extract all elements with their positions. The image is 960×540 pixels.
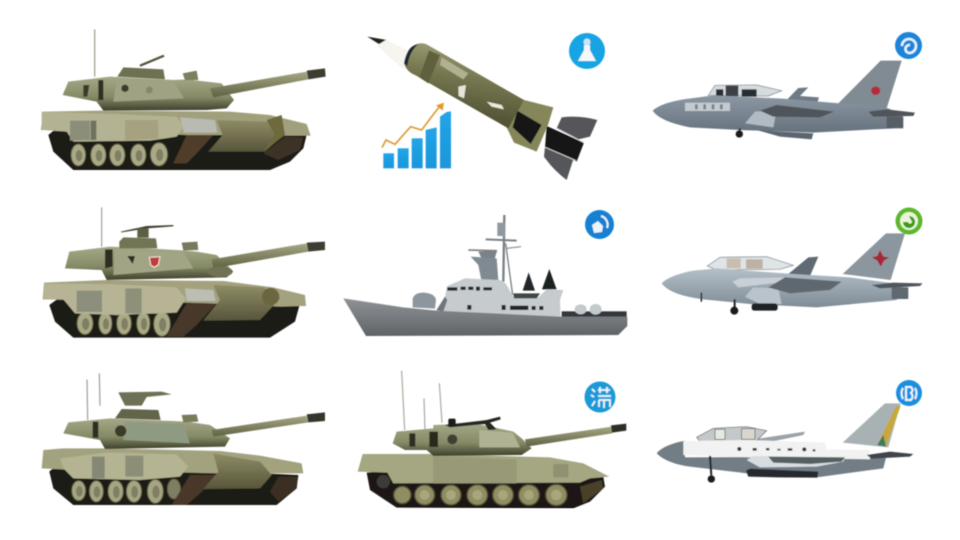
tank: bottom left bbox=[42, 373, 325, 505]
window dots bbox=[737, 447, 815, 451]
yellow tail stripe bbox=[877, 406, 901, 447]
wheel hubs bbox=[82, 318, 166, 331]
hull bbox=[343, 298, 627, 336]
hull deck bbox=[43, 280, 306, 307]
hull deck bbox=[42, 448, 303, 473]
road wheels bbox=[72, 479, 181, 503]
icon: blue globe badge bbox=[585, 210, 614, 239]
dorsal fin bbox=[787, 87, 819, 105]
fuselage lower bbox=[657, 441, 887, 477]
fuselage bbox=[653, 95, 903, 133]
dorsal fin bbox=[788, 257, 818, 276]
tail fin bbox=[843, 403, 901, 447]
track links bbox=[173, 135, 213, 163]
gun mantlet bbox=[207, 266, 233, 277]
under-wing pod bbox=[746, 469, 818, 478]
jet: middle right bbox=[662, 233, 923, 315]
side plate bbox=[180, 117, 217, 133]
air intake bbox=[745, 110, 777, 127]
tail emblem bbox=[871, 86, 880, 95]
main gun bbox=[212, 416, 308, 437]
missile body bbox=[404, 43, 524, 128]
canopy bbox=[707, 257, 793, 270]
bridge windows bbox=[447, 287, 543, 310]
missile with fins bbox=[367, 37, 597, 180]
road wheels bbox=[71, 143, 168, 166]
hull bbox=[358, 454, 609, 483]
white nose cone bbox=[377, 40, 412, 68]
fuselage white upper bbox=[683, 440, 870, 459]
main gun bbox=[210, 72, 308, 97]
tank: bottom centre bbox=[358, 371, 626, 508]
trend arrow bbox=[382, 106, 440, 148]
radar bbox=[478, 250, 497, 261]
wheel hubs bbox=[76, 149, 163, 161]
antenna bbox=[100, 207, 104, 247]
tail fin bbox=[843, 233, 905, 280]
tracks bbox=[48, 127, 307, 170]
tank: middle left bbox=[43, 207, 325, 338]
jet: top right bbox=[653, 61, 915, 139]
cupola bbox=[119, 237, 157, 248]
icon: blue glyph badge bbox=[584, 382, 616, 412]
glacis bbox=[203, 285, 280, 321]
track links bbox=[167, 303, 217, 337]
bar chart with rising arrow bbox=[382, 103, 451, 168]
icon: blue spiral badge bbox=[895, 32, 922, 59]
tailplane bbox=[872, 283, 923, 288]
canopy bbox=[708, 85, 782, 96]
deck gun bbox=[413, 293, 436, 309]
antennas bbox=[402, 371, 442, 430]
landing gear bbox=[710, 456, 711, 475]
under-wing pod bbox=[752, 303, 778, 311]
icon: blue B badge bbox=[896, 380, 922, 406]
tailplane bbox=[867, 452, 913, 459]
fuselage markings bbox=[685, 103, 730, 111]
aft deck equipment bbox=[575, 304, 602, 315]
turret bbox=[65, 247, 233, 280]
glacis bbox=[203, 453, 272, 489]
red emblem bbox=[149, 257, 160, 267]
cupola bbox=[117, 67, 165, 79]
nose tip bbox=[367, 37, 387, 46]
road wheels bbox=[394, 484, 567, 506]
icon: flask badge bbox=[569, 33, 605, 69]
icon: green ring badge bbox=[896, 208, 922, 234]
main gun bbox=[212, 243, 308, 268]
hull side skirt bbox=[42, 112, 184, 142]
dark cones bbox=[523, 272, 535, 291]
antenna bbox=[93, 29, 97, 77]
jet: bottom right bbox=[657, 403, 913, 483]
wing bbox=[768, 277, 842, 293]
fuselage bbox=[662, 268, 907, 307]
landing gear bbox=[737, 128, 742, 133]
hull side skirt bbox=[43, 283, 186, 315]
antennas bbox=[87, 373, 100, 420]
hull side skirt bbox=[60, 452, 188, 480]
landing gear bbox=[732, 299, 738, 308]
road wheels bbox=[77, 312, 170, 336]
air intake bbox=[745, 287, 782, 304]
canopy bbox=[697, 427, 767, 442]
wheel hubs bbox=[420, 490, 562, 500]
wheel hubs bbox=[76, 486, 160, 498]
turret bbox=[63, 77, 234, 111]
tail flare bbox=[507, 99, 553, 152]
wing bbox=[747, 456, 845, 467]
tail fin bbox=[838, 61, 902, 108]
glacis bbox=[208, 120, 283, 152]
tracks bbox=[49, 298, 299, 338]
red tail emblem bbox=[872, 250, 889, 267]
tail fins bbox=[557, 117, 597, 139]
side plate bbox=[185, 288, 216, 301]
aft deck rail bbox=[562, 311, 627, 317]
warship bbox=[343, 215, 627, 336]
tank: top left bbox=[41, 29, 326, 170]
tracks bbox=[49, 463, 298, 505]
roof machine gun bbox=[445, 417, 501, 430]
tracks bbox=[367, 470, 605, 508]
turret bbox=[63, 418, 230, 449]
cupola bbox=[115, 409, 161, 420]
turret bbox=[393, 423, 532, 456]
superstructure bbox=[435, 278, 563, 318]
bars bbox=[383, 111, 451, 168]
tailplane bbox=[868, 109, 915, 117]
main gun bbox=[525, 427, 612, 447]
track links bbox=[172, 475, 218, 505]
spine bbox=[753, 432, 805, 444]
mast bbox=[468, 215, 521, 295]
wing bbox=[760, 105, 834, 117]
drive sprocket bbox=[377, 475, 390, 488]
hull deck bbox=[41, 111, 311, 136]
